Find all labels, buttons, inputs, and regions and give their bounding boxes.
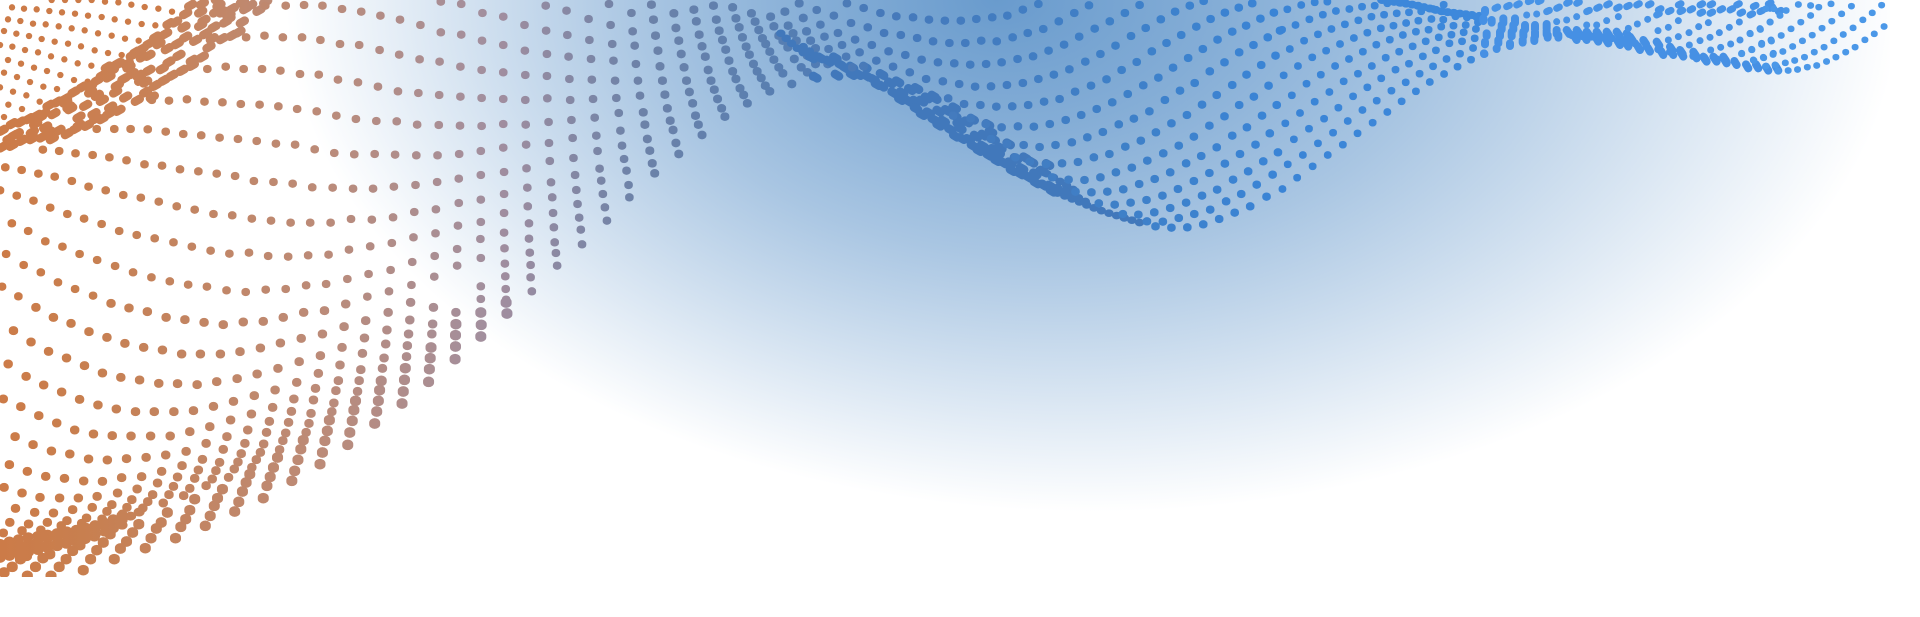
dot wave: central fold ridge, start and end sections (781, 33, 1140, 223)
dot wave: bottom-left dense band and boundary rows (0, 302, 507, 577)
dot wave: upper-left dense orange fold (0, 0, 268, 148)
dot wave: upper-left small orange grid (0, 0, 172, 117)
dot wave: converging columns near the centre fold (643, 3, 828, 174)
dot wave: main orange to mauve mesh, upper rows (0, 1, 640, 318)
dot wave: central fold ridge, middle section (810, 57, 1054, 192)
dot wave: top right jumbled cluster (1495, 0, 1781, 65)
dot wave: right blue mesh rows (1282, 0, 1484, 190)
dot wave: far-right light blue tail rows (1742, 3, 1884, 72)
dot wave: central blue mesh rows (817, 0, 1280, 228)
dot wave: main orange to mauve mesh, lower rows (3, 302, 481, 534)
dot wave: right fold ridge with short ticks (1483, 10, 1778, 71)
